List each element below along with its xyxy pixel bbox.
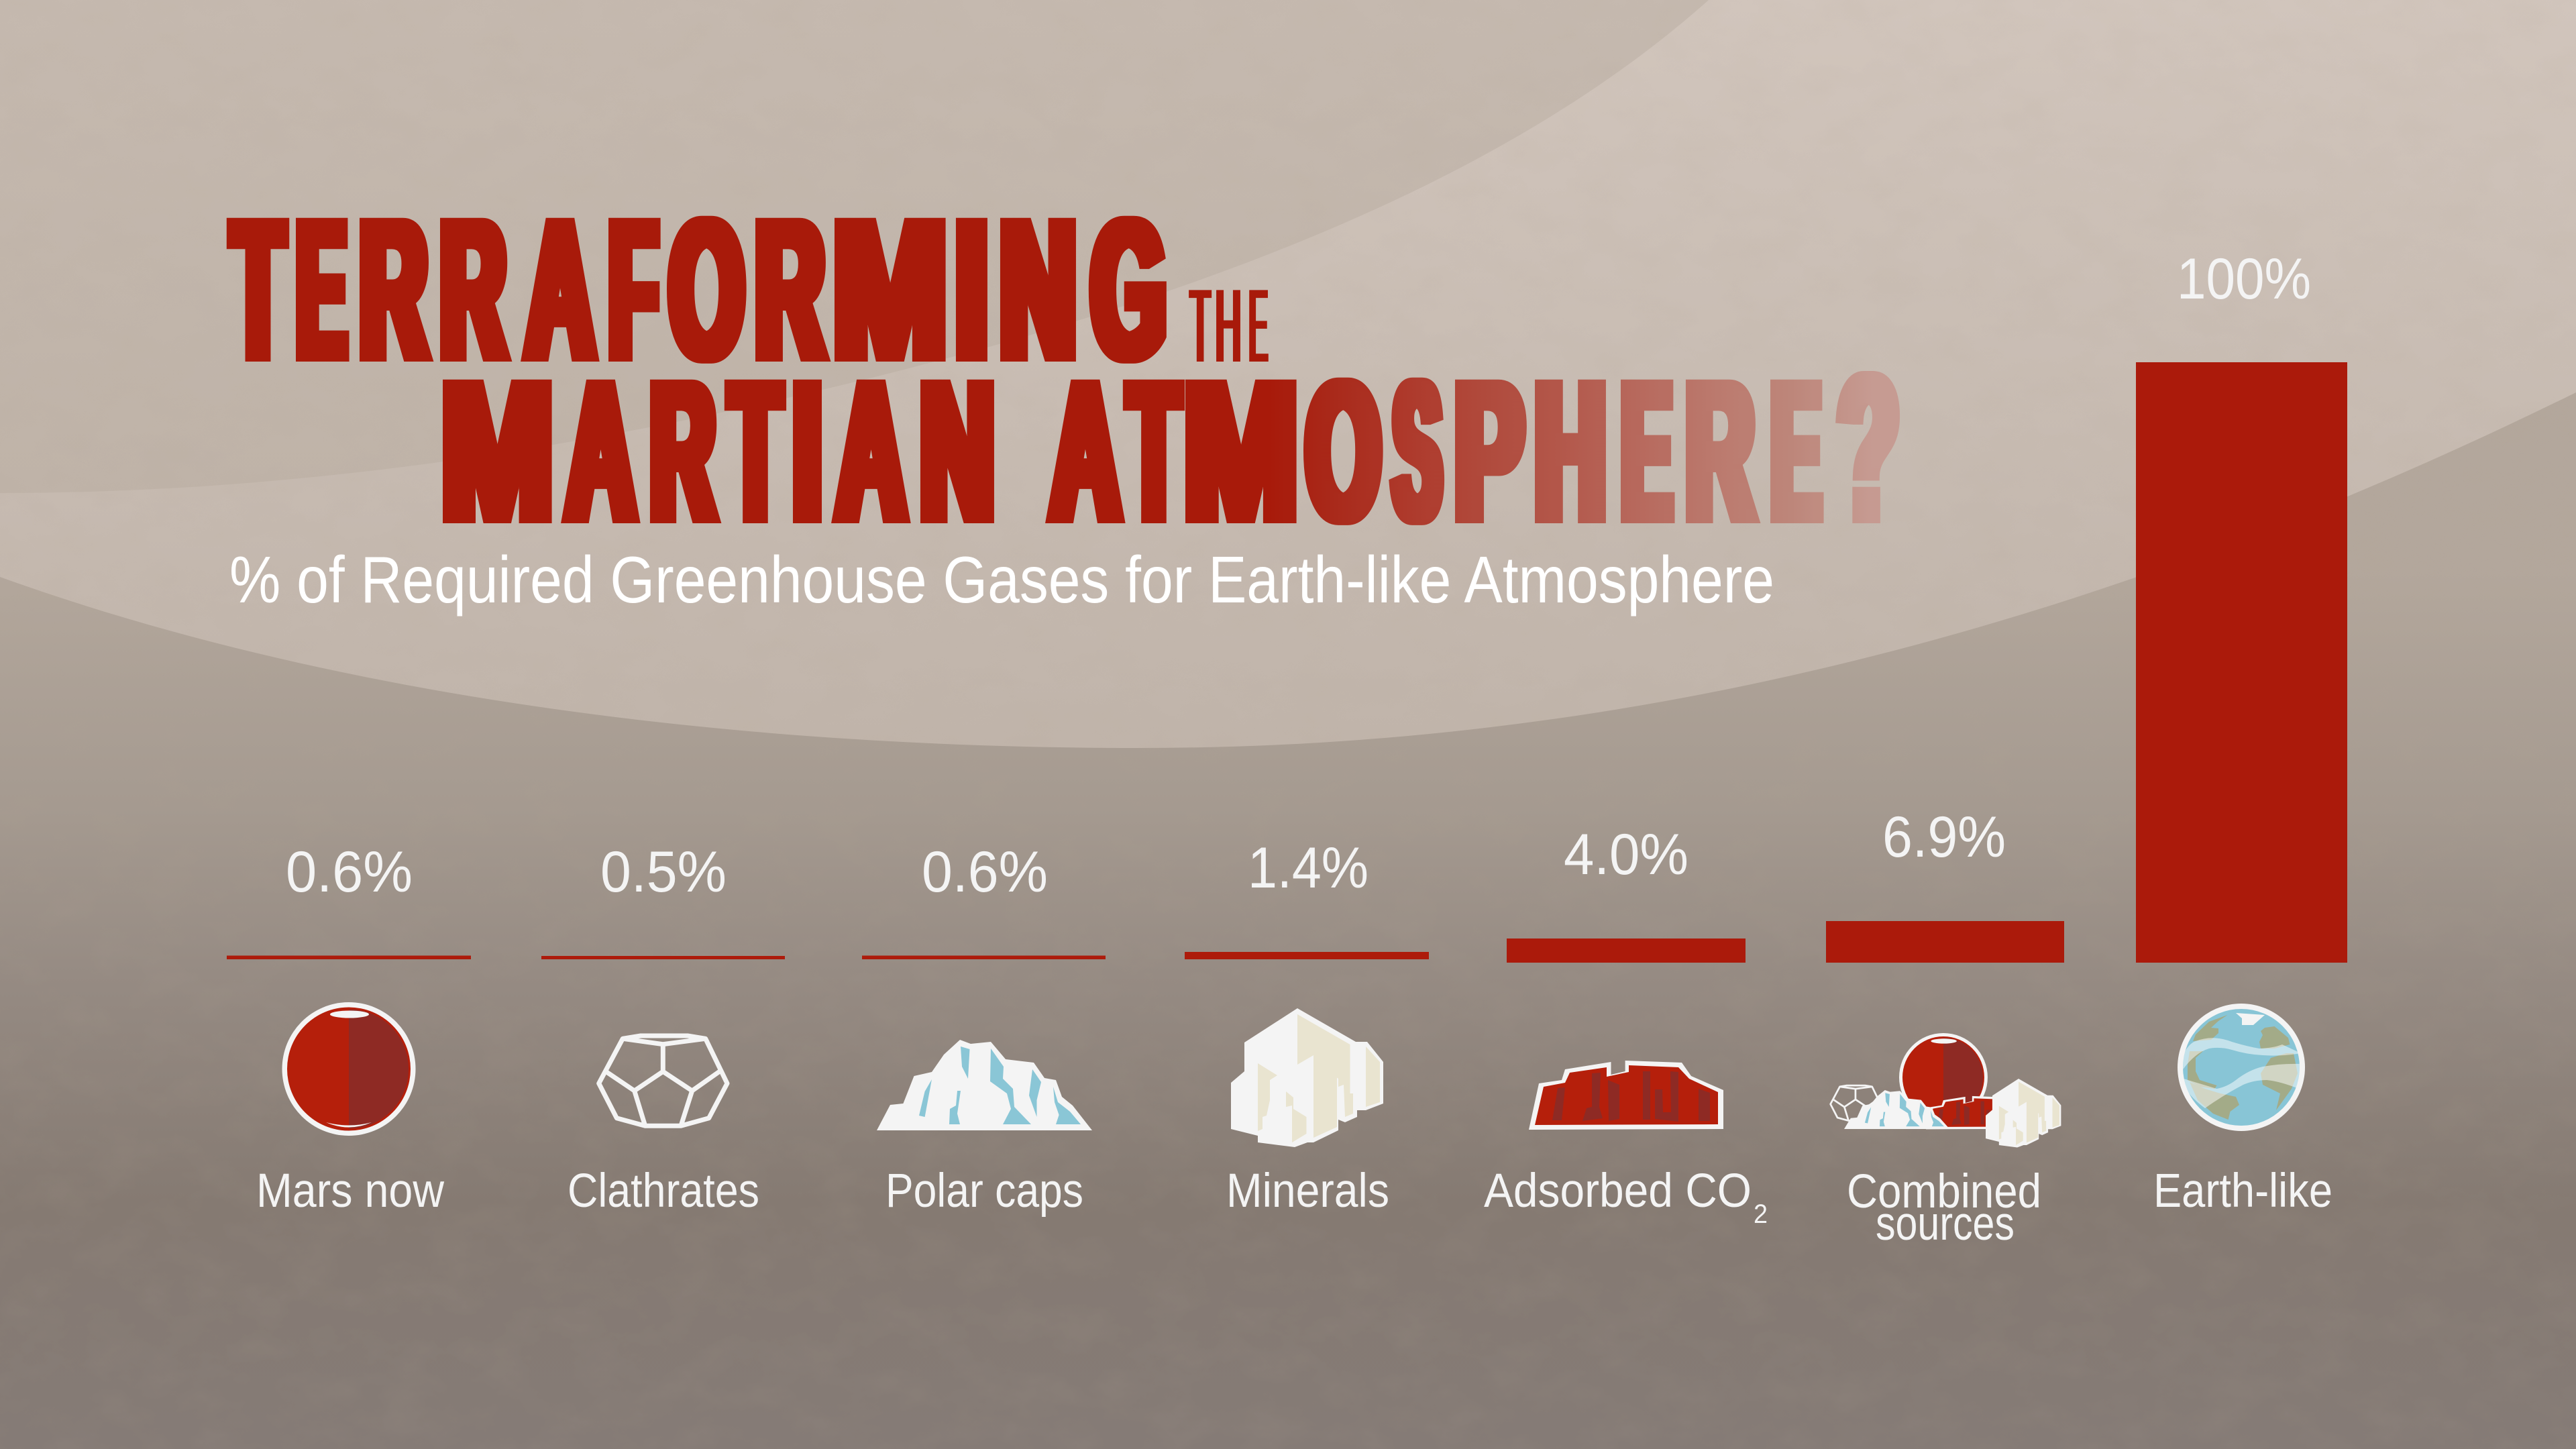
- title line: MARTIAN ATMOSPHERE?: A: [566, 342, 635, 560]
- title line: MARTIAN ATMOSPHERE?: A: [837, 342, 906, 560]
- title line: TERRAFORMING: I: [956, 180, 987, 398]
- label: Adsorbed CO2: Adsorbed CO: [1484, 1165, 1752, 1218]
- title line: MARTIAN ATMOSPHERE?: M: [441, 342, 553, 560]
- column: Combined sources: [1826, 805, 2064, 1250]
- title line: MARTIAN ATMOSPHERE?: N: [920, 342, 994, 560]
- icon: mineral crystals: [1231, 1008, 1383, 1147]
- title line: TERRAFORMING: R: [756, 180, 824, 398]
- value: 0.6%: 0.6%: [286, 840, 413, 904]
- title line: TERRAFORMING: A: [526, 180, 594, 398]
- subtitle: % of Required Greenhouse Gases for Earth-like Atmosphere: [229, 543, 1774, 616]
- icon: Mars: [282, 1002, 416, 1136]
- column: Minerals: [1185, 836, 1429, 1218]
- label: Clathrates: Clathrates: [568, 1165, 759, 1218]
- title line: MARTIAN ATMOSPHERE?: E: [1622, 342, 1671, 560]
- column: Polar caps: [862, 840, 1106, 1218]
- title line: MARTIAN ATMOSPHERE?: M: [1184, 342, 1297, 560]
- column: Adsorbed CO2: [1484, 822, 1768, 1229]
- icon: clathrate dodecahedron: [599, 1036, 727, 1126]
- title: E: [1249, 268, 1268, 384]
- label: Combined sources: Combined: [1847, 1165, 2041, 1218]
- title: [232, 180, 1898, 562]
- title line: TERRAFORMING: E: [297, 180, 345, 398]
- bar: Earth-like: [2136, 362, 2347, 963]
- title: G: [1091, 180, 1165, 398]
- title line: MARTIAN ATMOSPHERE?: E: [1772, 342, 1820, 560]
- background: upper-left darker curved shape: [0, 0, 1709, 493]
- title word: THE: H: [1216, 268, 1241, 384]
- label: Adsorbed CO2: 2: [1754, 1199, 1768, 1229]
- value: 4.0%: 4.0%: [1564, 822, 1688, 887]
- label: Polar caps: Polar caps: [885, 1165, 1083, 1218]
- label: Minerals: Minerals: [1226, 1165, 1389, 1218]
- icon: red mesa: [1529, 1061, 1723, 1130]
- title line: MARTIAN ATMOSPHERE?: T: [1128, 342, 1179, 560]
- bar chart: [227, 247, 2347, 1250]
- bar: Polar caps: [862, 955, 1106, 959]
- bar: Clathrates: [541, 956, 785, 959]
- bar: Minerals: [1185, 952, 1429, 959]
- icon: combined sources cluster: [1831, 1033, 2061, 1147]
- title word: THE: T: [1190, 268, 1210, 384]
- title line: TERRAFORMING: F: [610, 180, 657, 398]
- title line: MARTIAN ATMOSPHERE?: I: [793, 342, 821, 560]
- label: Earth-like: Earth-like: [2153, 1165, 2332, 1218]
- title line: MARTIAN ATMOSPHERE?: H: [1536, 342, 1605, 560]
- title line: TERRAFORMING: N: [1000, 180, 1076, 398]
- title line: TERRAFORMING: M: [833, 180, 947, 398]
- background: light curved swath: [0, 0, 2576, 748]
- bar: Combined sources: [1826, 921, 2064, 963]
- title line: TERRAFORMING: T: [232, 180, 284, 398]
- label: Combined sources: sources: [1876, 1197, 2015, 1250]
- column: Earth-like: [2136, 247, 2347, 1218]
- title line: TERRAFORMING: R: [360, 180, 427, 398]
- value: 6.9%: 6.9%: [1882, 805, 2006, 869]
- value: 0.5%: 0.5%: [600, 840, 727, 904]
- title line: TERRAFORMING: O: [670, 180, 743, 398]
- title line: MARTIAN ATMOSPHERE?: P: [1456, 342, 1523, 560]
- bar: Adsorbed CO2: [1507, 938, 1746, 963]
- value: 100%: 100%: [2177, 247, 2311, 311]
- column: Clathrates: [541, 840, 785, 1218]
- title line: MARTIAN ATMOSPHERE?: A: [1051, 342, 1120, 560]
- value: 0.6%: 0.6%: [922, 840, 1048, 904]
- label: Mars now: Mars now: [256, 1165, 445, 1218]
- title line: MARTIAN ATMOSPHERE?: R: [651, 342, 714, 560]
- icon: Earth: [2178, 1004, 2305, 1131]
- title line: MARTIAN ATMOSPHERE?: T: [730, 342, 781, 560]
- text: ?: [1838, 333, 1898, 562]
- title line: TERRAFORMING: R: [441, 180, 505, 398]
- title line: MARTIAN ATMOSPHERE?: O: [1307, 342, 1380, 560]
- icon: iceberg: [877, 1040, 1092, 1130]
- value: 1.4%: 1.4%: [1248, 836, 1368, 900]
- column: Mars now: [227, 840, 471, 1218]
- bar: Mars now: [227, 955, 471, 959]
- title line: MARTIAN ATMOSPHERE?: S: [1393, 342, 1441, 560]
- title line: MARTIAN ATMOSPHERE?: R: [1686, 342, 1754, 560]
